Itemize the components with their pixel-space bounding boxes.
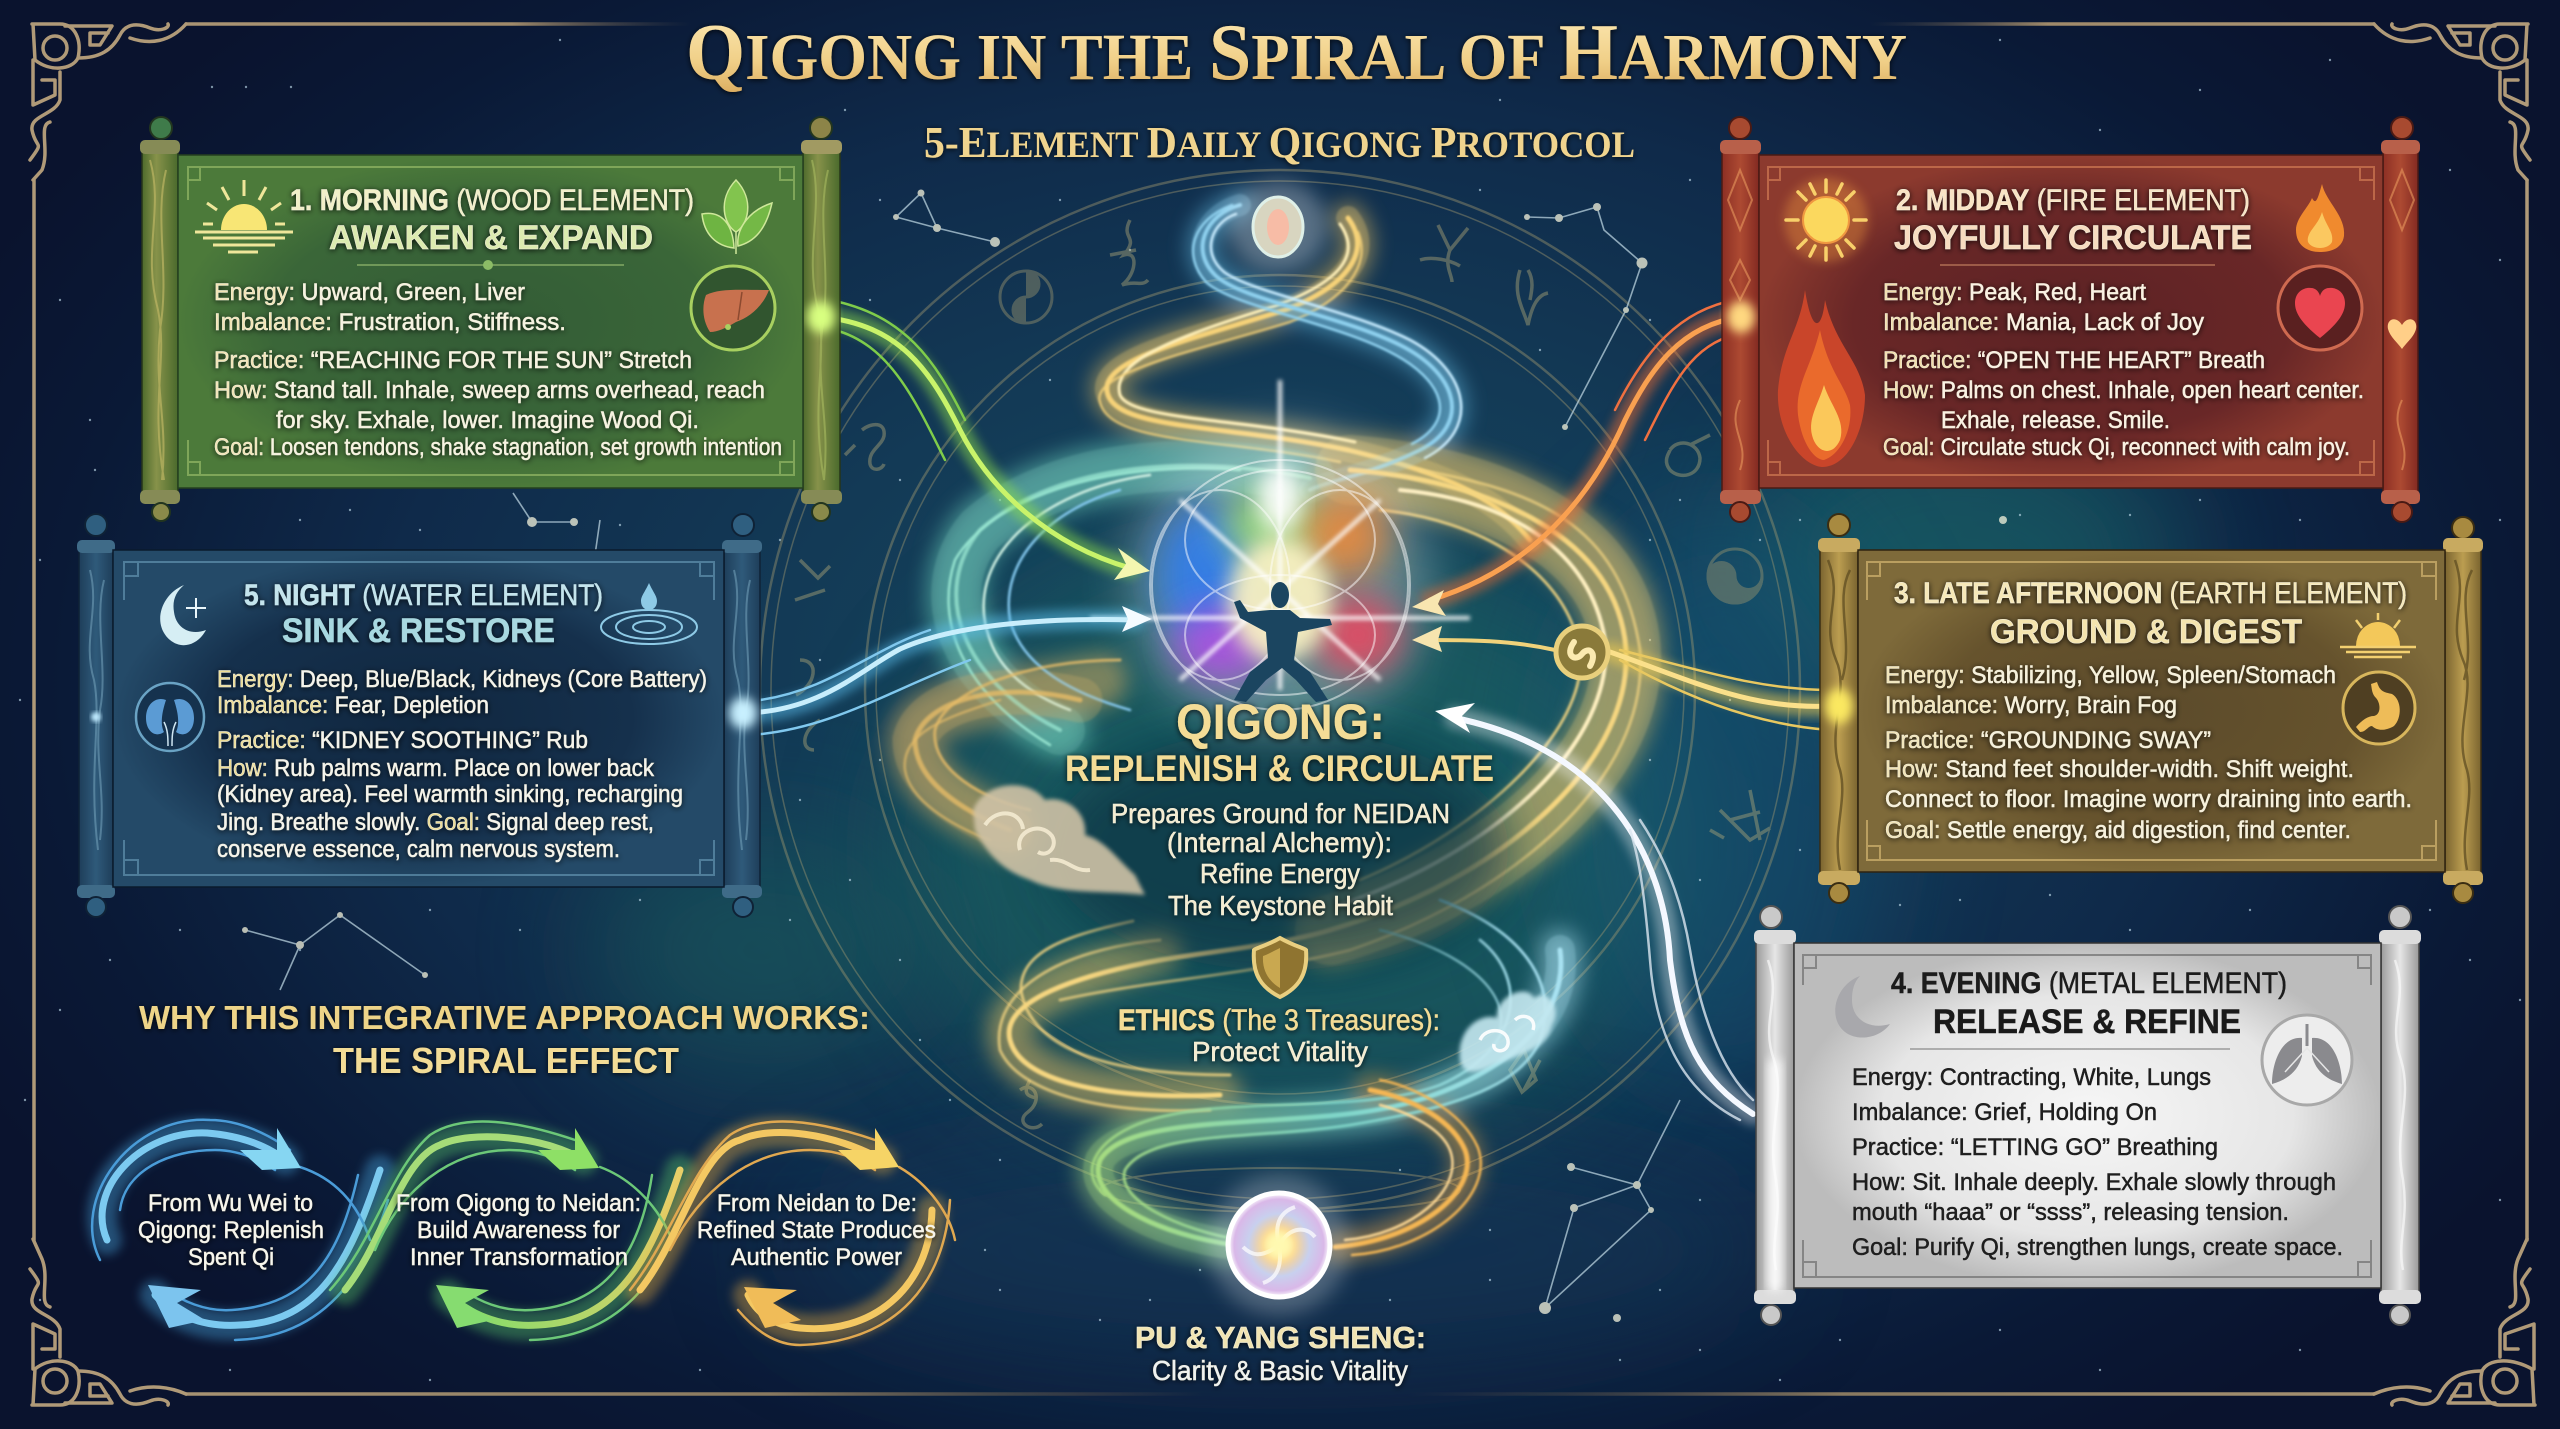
icon: silver crescent [1835,976,1890,1038]
roller right [2379,906,2421,1325]
centre text: ethics: ETHICS (The 3 Treasures): [1118,1004,1440,1037]
subtitle: 5-ELEMENT DAILY QIGONG PROTOCOL [924,118,1635,167]
zodiac rings and faint glyphs [760,170,1800,1212]
icon: rising sun [195,180,293,252]
icon: heart [2278,266,2362,350]
panel 2 heading: 2. MIDDAY (FIRE ELEMENT) [1896,184,2250,217]
panel 2 body text: Goal: Circulate stuck Qi, reconnect with calm joy. [1883,434,2350,461]
centre heading: qigong [1065,694,1494,789]
figure in qigong stance [1234,582,1332,702]
arrow: earth element to centre (yellow) with medallion [1412,626,1830,730]
roller right [2381,117,2420,522]
panel 4 body text [1852,1064,2343,1261]
loop text: wu wei to qigong [138,1190,324,1271]
ribbon: large golden ring [999,470,1641,1111]
loop 3: gold [630,1122,955,1345]
roller left [1720,117,1761,522]
panel 1 body text: Practice: “REACHING FOR THE SUN” Stretch [214,347,692,374]
icon: setting sun [2340,613,2416,657]
roller right [801,117,842,521]
icon: sun [1784,178,1868,262]
centre heading: qigong: REPLENISH & CIRCULATE [1065,748,1494,789]
heading: why this approach works: THE SPIRAL EFFECT [333,1040,679,1081]
panel 3 body text: Imbalance: Worry, Brain Fog [1885,692,2177,719]
loop text: qigong to neidan: Inner Transformation [410,1244,628,1271]
panel 4 heading [1891,967,2287,1041]
panel 1 heading [290,184,694,257]
spiral of energy: ribbons around the centre [905,205,1641,1255]
ribbon: teal band to lower orb [1092,900,1561,1245]
panel 5 body text: Imbalance: Fear, Depletion [217,692,489,719]
central mandala of rainbow light [1090,380,1470,730]
panel 4 body text: Imbalance: Grief, Holding On [1852,1099,2157,1126]
centre text: prepares ground: Refine Energy [1200,858,1360,889]
cloud right (pale blue) [1460,992,1556,1072]
icon: green leaves [702,180,772,254]
panel 2 heading [1894,184,2252,257]
panel 3 heading: 3. LATE AFTERNOON (EARTH ELEMENT) [1894,577,2407,610]
icon: large flame [1778,290,1865,467]
panel 5 heading [244,579,603,650]
panel 2 body text [1883,279,2364,461]
parchment [1858,550,2445,872]
ribbon: glow layer [915,205,1626,1247]
dark teal space behind the centre text [1050,730,1510,970]
icon: water drop and ripples [601,583,697,644]
heading: why this approach works [139,999,870,1081]
bottom spiral orb [1209,1175,1349,1315]
heading: why this approach works: WHY THIS INTEGRATIVE APPROACH WORKS: [139,999,870,1036]
constellations [242,190,2007,1322]
loop text: qigong to neidan: From Qigong to Neidan: [396,1190,641,1217]
loop 2: green [330,1122,690,1340]
panel 5 body text: Practice: “KIDNEY SOOTHING” Rub [217,727,588,754]
icon: small flame [2296,184,2344,252]
panel 3 body text: Practice: “GROUNDING SWAY” [1885,727,2211,754]
panel 1 body text: Energy: Upward, Green, Liver [214,279,525,306]
roller right [722,514,762,917]
panel 2 heading: JOYFULLY CIRCULATE [1894,219,2252,257]
panel 3 body text: How: Stand feet shoulder-width. Shift weight. [1885,756,2354,783]
loop text: qigong to neidan [396,1190,641,1271]
panel 3 body text: Energy: Stabilizing, Yellow, Spleen/Stomach [1885,662,2336,689]
panel 1 body text: Imbalance: Frustration, Stiffness. [214,309,566,336]
roller left [77,514,115,917]
cloud left (beige) [973,785,1145,895]
panel 4 body text: Goal: Purify Qi, strengthen lungs, create space. [1852,1234,2343,1261]
panel 1 heading: 1. MORNING (WOOD ELEMENT) [290,184,694,217]
icon: stomach [2343,672,2415,744]
parchment [1794,943,2381,1288]
panel 5 heading: SINK & RESTORE [282,612,555,650]
panel 1: morning, wood element [140,117,842,521]
icon: shield [1254,938,1306,997]
panel 5 heading: 5. NIGHT (WATER ELEMENT) [244,579,603,612]
panel 2 body text: Imbalance: Mania, Lack of Joy [1883,309,2204,336]
panel 4 body text: Practice: “LETTING GO” Breathing [1852,1134,2218,1161]
centre text: ethics: Protect Vitality [1192,1036,1368,1067]
parchment [1759,155,2383,488]
icon: lungs [2262,1015,2352,1105]
panel 2: midday, fire element [1720,117,2420,522]
centre text: prepares ground: The Keystone Habit [1168,890,1393,921]
loop text: wu wei to qigong: Spent Qi [188,1244,274,1271]
ribbon: gold lower loop [1335,1080,1481,1255]
panel 2 body text: Practice: “OPEN THE HEART” Breath [1883,347,2265,374]
roller left [1818,514,1860,903]
roller right [2443,517,2483,903]
ribbon: gold top S [1099,218,1530,540]
panel 1 body text: for sky. Exhale, lower. Imagine Wood Qi. [276,407,699,434]
top orb [1228,181,1328,273]
ribbon: golden tail into cloud [905,660,1120,840]
panel 5 body text: (Kidney area). Feel warmth sinking, recharging [217,781,683,808]
corner ornament bottom-right [2374,1239,2535,1405]
panel 2 body text: Exhale, release. Smile. [1941,407,2170,434]
glyph scribbles [795,220,1770,1128]
panel 3: late afternoon, earth element [1818,514,2483,903]
ribbon: blue top S [1193,205,1461,490]
foundation label: Clarity & Basic Vitality [1152,1355,1408,1386]
panel 4: evening, metal element [1754,906,2421,1325]
corner ornament top-left [30,24,186,180]
panel 4 body text: How: Sit. Inhale deeply. Exhale slowly through [1852,1169,2336,1196]
roller left [140,117,180,521]
icon: liver [691,266,775,350]
panel 2 body text: Energy: Peak, Red, Heart [1883,279,2146,306]
panel 5 body text: Energy: Deep, Blue/Black, Kidneys (Core Battery) [217,666,707,693]
ribbon: cyan-green arcs left of centre [949,466,1310,745]
centre text: ethics [1118,1004,1440,1067]
arrow: wood element to centre (green) [822,300,1150,580]
panel 5 body text [217,666,707,863]
centre text: prepares ground: Prepares Ground for NEIDAN [1111,798,1450,829]
yin-yang glyph left [1000,271,1052,323]
panel 1 heading: AWAKEN & EXPAND [329,219,653,257]
centre text: prepares ground: (Internal Alchemy): [1167,827,1392,858]
arrow: metal element to centre (white) [1435,703,1753,1120]
panel 4 heading: 4. EVENING (METAL ELEMENT) [1891,967,2287,1000]
roller left [1754,906,1796,1325]
diagram: spiral effect loops [92,1120,955,1345]
corner ornament bottom-left [30,1239,186,1405]
panel 5 body text: conserve essence, calm nervous system. [217,836,620,863]
panel 5 body text: How: Rub palms warm. Place on lower back [217,755,655,782]
parchment [178,155,803,488]
panel 5: night, water element [77,514,762,917]
loop text: neidan to de [697,1190,936,1271]
panel 2 body text: How: Palms on chest. Inhale, open heart center. [1883,377,2364,404]
panel 4 body text: Energy: Contracting, White, Lungs [1852,1064,2211,1091]
loop text: neidan to de: From Neidan to De: [717,1190,917,1217]
panel 5 body text: Jing. Breathe slowly. Goal: Signal deep rest, [217,809,654,836]
loop text: wu wei to qigong: From Wu Wei to [148,1190,313,1217]
arrow: water element to centre (blue) [743,606,1152,735]
parchment [113,550,724,887]
corner ornament top-right [2374,24,2530,180]
loop text: wu wei to qigong: Qigong: Replenish [138,1217,324,1244]
main title: QIGONG IN THE SPIRAL OF HARMONY [686,9,1907,97]
loop text: neidan to de: Authentic Power [731,1244,902,1271]
panel 1 body text: Goal: Loosen tendons, shake stagnation, set growth intention [214,434,782,461]
foundation label [1135,1320,1426,1386]
loop text: qigong to neidan: Build Awareness for [417,1217,620,1244]
loop text: neidan to de: Refined State Produces [697,1217,936,1244]
icon: crescent moon [160,585,206,645]
panel 3 heading [1894,577,2407,651]
panel 4 heading: RELEASE & REFINE [1933,1003,2241,1041]
panel 4 body text: mouth “haaa” or “ssss”, releasing tension. [1852,1199,2289,1226]
centre text: prepares ground [1111,798,1450,921]
panel 3 body text [1885,662,2412,844]
foundation label: PU & YANG SHENG: [1135,1320,1426,1355]
loop 1: blue [92,1120,388,1340]
centre heading: qigong: QIGONG: [1176,694,1385,750]
panel 3 body text: Connect to floor. Imagine worry draining into earth. [1885,786,2412,813]
panel 1 body text [214,279,782,461]
panel 1 body text: How: Stand tall. Inhale, sweep arms overhead, reach [214,377,765,404]
panel 3 heading: GROUND & DIGEST [1990,613,2302,651]
arrow: fire element to centre (orange) [1412,300,1741,616]
yin-yang glyph right [1708,549,1762,603]
icon: kidneys [136,683,204,751]
panel 3 body text: Goal: Settle energy, aid digestion, find center. [1885,817,2351,844]
